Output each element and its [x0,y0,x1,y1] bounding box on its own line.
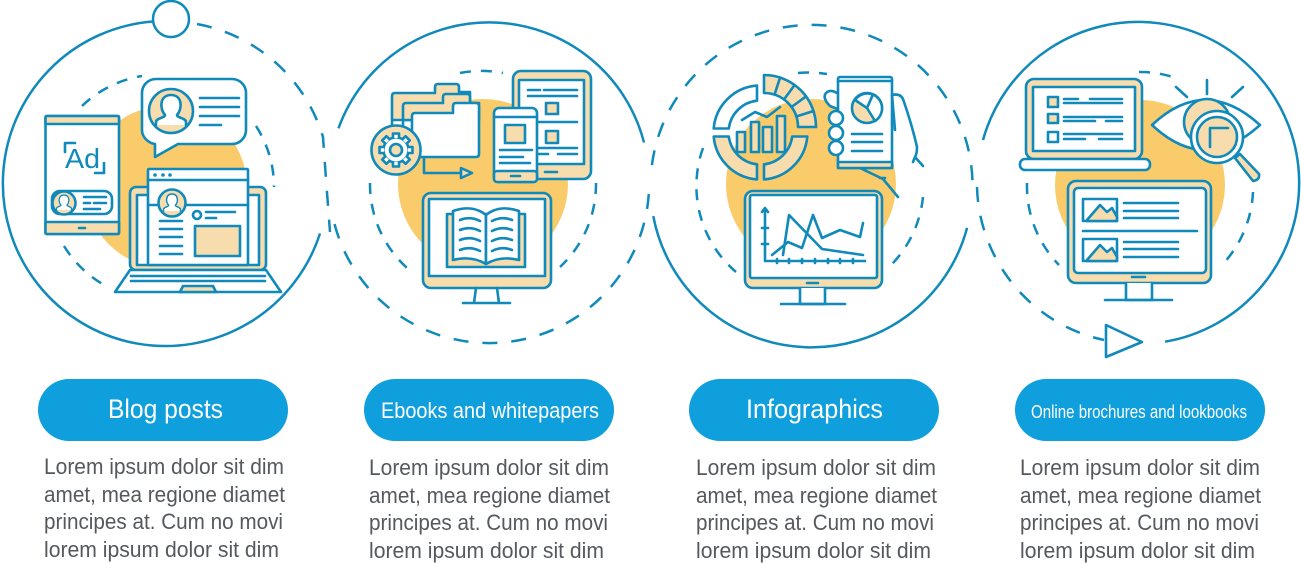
text block: ebooks: Lorem ipsum dolor sit dim [369,455,609,480]
outer ring dashed [652,25,973,190]
icon: laptop with checklist [1020,79,1150,170]
yellow disc [726,99,896,269]
text block: blog posts: Lorem ipsum dolor sit dim [44,454,284,479]
panel: ebooks circle [334,22,649,343]
icon: donut and bar chart [714,75,816,179]
inner dashes [1027,72,1253,267]
outer ring solid [983,22,1299,342]
heading pill: ebooks and whitepapers [364,379,614,441]
heading pill: online brochures and lookbooks [1015,379,1265,441]
icon: hand holding phone [825,77,923,197]
outer ring dashed [334,190,649,343]
heading pill: online brochures and lookbooks: Online brochures and lookbooks [1031,402,1247,422]
text block: ebooks: principes at. Cum no movi [369,510,608,535]
text block: online brochures: Lorem ipsum dolor sit dim [1020,455,1260,480]
text block: online brochures: principes at. Cum no movi [1020,510,1259,535]
panel: infographics circle [652,25,973,347]
icon: ad tablet: Ad [65,143,100,174]
heading pill: blog posts [38,379,288,441]
yellow disc [85,106,247,268]
text block: infographics [696,455,938,563]
text block: online brochures: lorem ipsum dolor sit dim [1020,538,1255,563]
heading pill: ebooks and whitepapers: Ebooks and whitepapers [381,398,599,423]
icon: monitor with line chart [745,191,882,304]
yellow disc [1055,100,1225,270]
heading pill: infographics [689,379,939,441]
icon: monitor with open book [423,193,551,303]
panel: online brochures circle [977,22,1299,357]
text block: ebooks: lorem ipsum dolor sit dim [369,538,604,563]
yellow disc [398,99,568,269]
outer ring dashed [977,187,1104,340]
inner dashes [696,72,923,272]
icon: monitor with image cards [1068,181,1211,300]
text block: infographics: lorem ipsum dolor sit dim [696,538,931,563]
panel: blog posts circle [3,1,330,346]
outer ring solid [3,22,320,346]
heading pill: blog posts: Blog posts [108,394,223,424]
text block: ebooks: amet, mea regione diamet [369,483,611,508]
inner dashes [370,71,596,273]
text block: blog posts [44,454,286,562]
outer ring dashed [197,24,330,232]
start marker circle [153,1,189,37]
text block: infographics: principes at. Cum no movi [696,510,934,535]
icon: eye under magnifier [1152,80,1260,181]
text block: infographics: amet, mea regione diamet [696,483,938,508]
icon: speech bubble with profile [142,79,246,157]
icon: tablet and phone [494,71,591,182]
text block: online brochures: amet, mea regione diamet [1020,483,1262,508]
outer ring solid [653,216,967,347]
heading pill: infographics: Infographics [746,394,883,424]
icon: laptop with browser window [115,169,281,292]
icon: ad tablet [46,116,119,234]
text block: online brochures [1020,455,1262,563]
text block: infographics: Lorem ipsum dolor sit dim [696,455,936,480]
text block: blog posts: amet, mea regione diamet [44,482,286,507]
inner dashes [64,76,274,286]
arrow triangle [1106,325,1142,357]
text block: blog posts: principes at. Cum no movi [44,509,283,534]
text block: blog posts: lorem ipsum dolor sit dim [44,537,279,562]
icon: folders with gear [372,84,479,178]
outer ring solid [338,22,644,143]
text block: ebooks [369,455,611,563]
